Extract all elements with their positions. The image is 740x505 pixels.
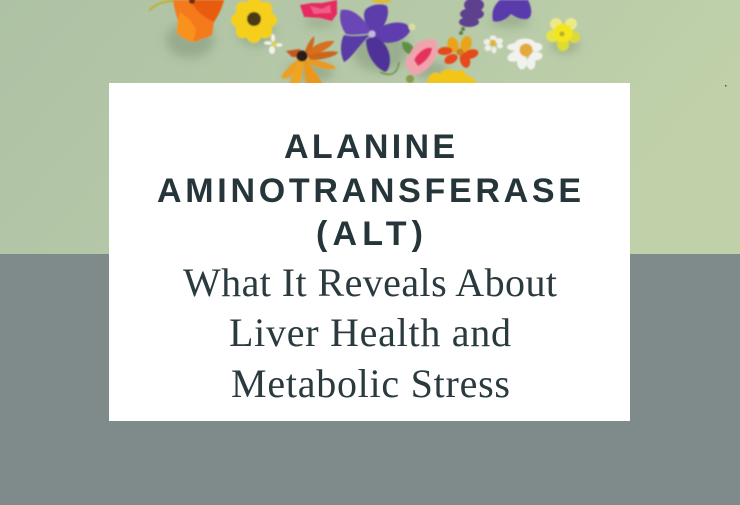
heading: ALT title: [157, 128, 581, 253]
heading: ALT title: AMINOTRANSFERASE: [157, 172, 581, 210]
panel: white title card: [109, 83, 630, 421]
icon: yellow petal at top edge: [370, 0, 392, 3]
icon: bud and stem: [380, 24, 416, 83]
icon: purple flower top right: [492, 0, 531, 22]
flower shadows: [166, 13, 579, 82]
icon: purple bellflower large: [340, 4, 410, 72]
icon: pink carnation: [406, 39, 437, 75]
icon: yellow marigold bottom: [427, 69, 477, 83]
subtitle: what it reveals: Metabolic Stress: [231, 361, 510, 406]
icon: yellow buttercup: [546, 18, 580, 51]
icon: orange rudbeckia: [281, 36, 338, 84]
icon: sunflower: [231, 0, 277, 43]
subtitle: what it reveals: [183, 260, 557, 406]
background: sage green upper band: [0, 0, 740, 254]
heading: ALT title: ALANINE: [284, 128, 455, 166]
icon: lavender sprig: [459, 0, 484, 35]
icon: orange nasturtium: [149, 0, 224, 42]
icon: small white daisy left: [264, 34, 282, 54]
subtitle: what it reveals: What It Reveals About: [183, 260, 557, 305]
background: slate grey lower band: [0, 254, 740, 505]
icon: red-orange marigold: [437, 35, 479, 69]
subtitle: what it reveals: Liver Health and: [229, 310, 511, 355]
photo: flat-lay of flowers: [149, 0, 580, 84]
icon: small white daisy right: [484, 36, 503, 54]
heading: ALT title: (ALT): [316, 215, 423, 253]
icon: pink carnation top: [300, 0, 337, 21]
speck on background: [725, 85, 726, 86]
icon: white daisy: [506, 38, 542, 70]
